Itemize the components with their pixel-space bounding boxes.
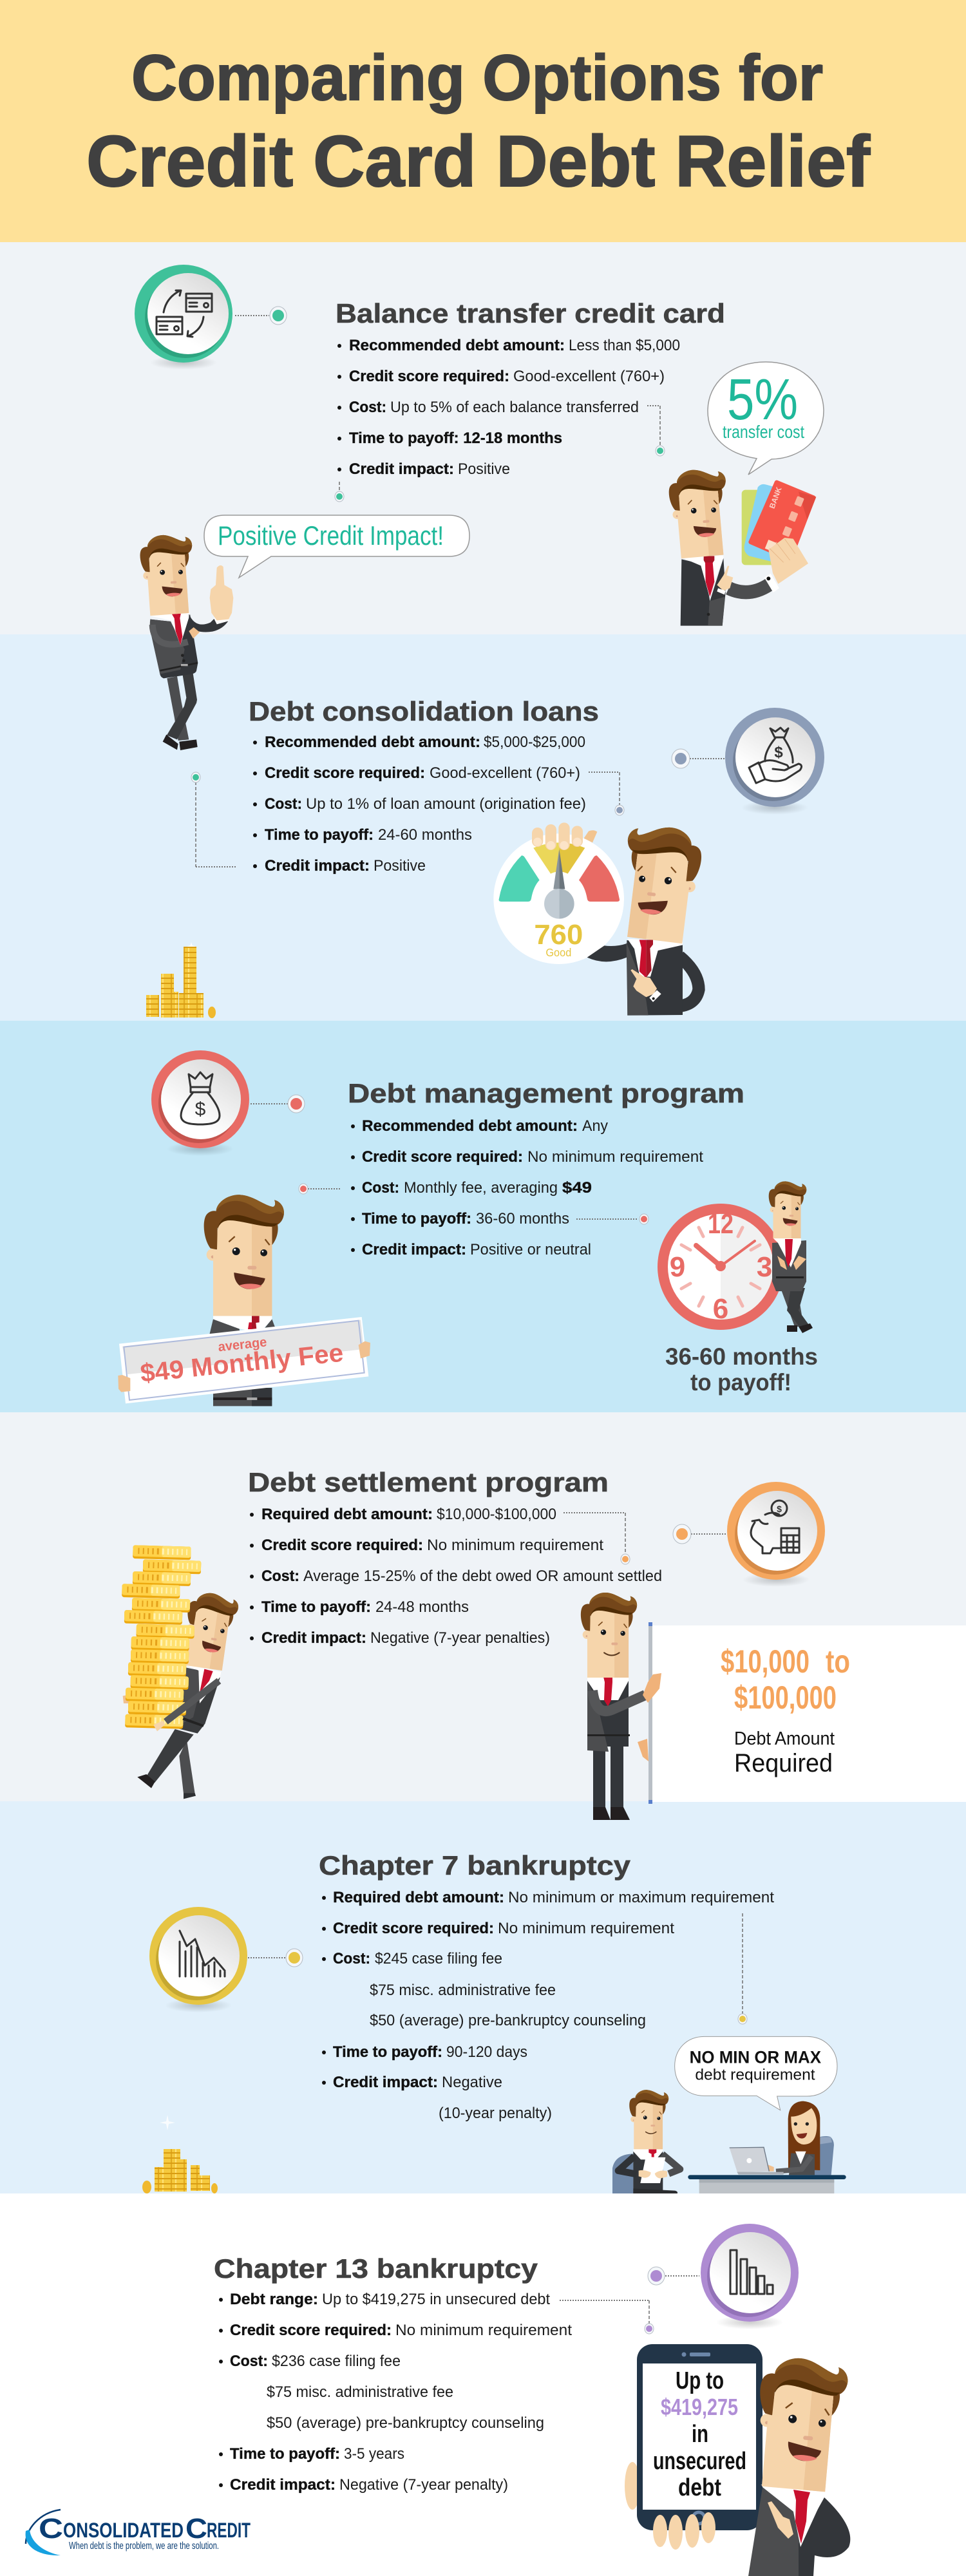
connector: debt range to phone (560, 2300, 654, 2334)
bullet list: 36-60 months (476, 1210, 569, 1227)
icon: money bag: $ (195, 1099, 206, 1120)
character: man with gauge (587, 822, 705, 1016)
bullet list: No minimum requirement (527, 1148, 703, 1166)
panel: debt amount required board (649, 1622, 966, 1804)
bullet list: Time to payoff: (230, 2445, 340, 2463)
title line 2: Credit Card Debt Relief (86, 121, 871, 202)
panel: title banner (0, 0, 966, 242)
bullet list: Negative (7-year penalties) (370, 1629, 550, 1647)
icon: money bag in hand (725, 708, 824, 815)
clock: 6 (713, 1293, 728, 1325)
bullet list: $236 case filing fee (272, 2353, 401, 2370)
bullet list: Positive or neutral (470, 1241, 591, 1258)
bullet list: Positive (458, 460, 510, 478)
bullet list: 3-5 years (344, 2445, 404, 2463)
icon: falling chart (149, 1907, 247, 2012)
character: man holding credit cards (667, 467, 816, 626)
bullet list: Average 15-25% of the debt owed OR amount settled (303, 1567, 662, 1585)
speech bubble: no min or max: debt requirement (695, 2066, 815, 2083)
icon: piggy bank and calculator: $ (777, 1504, 782, 1514)
connector: icon (235, 307, 287, 325)
bullet list: $75 misc. administrative fee (267, 2383, 453, 2401)
bullet list (322, 1889, 774, 2122)
callout: 36-60 months (665, 1343, 818, 1396)
clock: 9 (670, 1251, 685, 1283)
bullet list: $50 (average) pre-bankruptcy counseling (370, 2012, 646, 2029)
bullet list: Credit impact: (261, 1629, 366, 1647)
bullet list: Credit score required: (230, 2322, 392, 2339)
icon: declining bars (701, 2224, 799, 2329)
bullet list: Any (582, 1117, 608, 1135)
bullet list: Good-excellent (760+) (430, 764, 580, 782)
heading: Balance transfer credit card (336, 298, 725, 328)
bullet list: Credit impact: (333, 2074, 438, 2091)
character: man holding credit cards: BANK (768, 486, 784, 510)
heading: Chapter 13 bankruptcy (214, 2253, 538, 2284)
phone with debt limit: unsecured (653, 2448, 746, 2475)
panel: debt amount required board: Debt Amount (734, 1728, 835, 1749)
connector: icon to heading (648, 2267, 699, 2285)
bullet list: 24-60 months (378, 826, 472, 844)
bullet list: Credit score required: (265, 764, 425, 782)
character: man pointing at phone (748, 2355, 850, 2576)
bullet list: Up to 5% of each balance transferred (390, 399, 639, 416)
bullet list (351, 1117, 703, 1258)
bullet list: $245 case filing fee (375, 1950, 502, 1967)
bullet list: Negative (442, 2074, 502, 2091)
bullet list: $10,000-$100,000 (437, 1506, 556, 1523)
icon: piggy bank and calculator (727, 1482, 825, 1587)
bullet list: Credit score required: (333, 1920, 494, 1937)
panel: debt amount required board: $100,000 (734, 1680, 837, 1716)
bullet list: Cost: (265, 795, 302, 813)
bullet list: No minimum requirement (427, 1537, 603, 1554)
bullet list: Cost: (261, 1567, 299, 1585)
bullet list: Credit impact: (362, 1241, 466, 1258)
bullet list (250, 1506, 662, 1647)
connector: icon to cost (248, 1949, 303, 1967)
panel: debt amount required board: Required (734, 1749, 833, 1777)
heading: Debt settlement program (248, 1467, 609, 1497)
connector: icon (251, 1095, 305, 1113)
callout: 36-60 months: 36-60 months (665, 1343, 818, 1370)
bullet list: Positive (374, 857, 426, 875)
character: man holding sign (118, 1195, 370, 1406)
bullet list: Recommended debt amount: (349, 337, 565, 354)
panel: debt amount required board: $10,000 (721, 1643, 810, 1680)
bullet list: 90-120 days (446, 2043, 527, 2061)
logo: Consolidated Credit: REDIT (207, 2519, 251, 2542)
credit score gauge (493, 822, 624, 964)
bullet list: Cost: (333, 1950, 370, 1967)
character: man at board (581, 1593, 661, 1820)
icon: money bag (151, 1050, 249, 1156)
bullet list: Cost: (230, 2353, 268, 2370)
bullet list: Required debt amount: (333, 1889, 504, 1906)
character: woman at laptop (730, 2101, 834, 2175)
bullet list: Credit impact: (265, 857, 370, 875)
logo: Consolidated Credit (26, 2510, 251, 2555)
bullet list: Cost: (349, 399, 386, 416)
credit score gauge: Good (545, 946, 571, 959)
callout: 36-60 months: to payoff! (690, 1369, 791, 1396)
connector: cost to bubble (647, 406, 665, 456)
bullet list: No minimum requirement (395, 2322, 572, 2339)
bullet list: Time to payoff: (362, 1210, 471, 1227)
bullet list: Required debt amount: (261, 1506, 433, 1523)
icon: card transfer (135, 265, 232, 370)
phone with debt limit (625, 2344, 762, 2550)
connector: credit impact (191, 772, 237, 867)
bullet list: No minimum requirement (498, 1920, 674, 1937)
panel: debt amount required board: to (826, 1643, 850, 1680)
phone with debt limit: in (692, 2421, 708, 2448)
panel: Debt management program (0, 1021, 966, 1412)
connector: icon (673, 1524, 726, 1544)
connector: credit impact to bubble (335, 482, 344, 502)
speech bubble: positive credit impact: Positive Credit Impact! (218, 520, 444, 551)
bullet list: Cost: (362, 1179, 399, 1197)
logo: Consolidated Credit: When debt is the problem, we are the solution. (69, 2541, 219, 2552)
bullet list: Credit impact: (349, 460, 454, 478)
bullet list: Good-excellent (760+) (513, 368, 665, 385)
bullet list (253, 734, 586, 875)
bullet list: Less than $5,000 (569, 337, 680, 354)
bullet list: Debt range: (230, 2291, 318, 2308)
clock: 3 (757, 1251, 772, 1283)
speech bubble: positive credit impact (204, 515, 469, 578)
bullet list: No minimum or maximum requirement (508, 1889, 774, 1906)
connector: cost to sign (299, 1184, 340, 1194)
panel: Debt consolidation loans (0, 634, 966, 1021)
bullet list: Credit score required: (261, 1537, 423, 1554)
panel: Chapter 13 bankruptcy (0, 2193, 966, 2576)
heading: Debt management program (348, 1078, 744, 1108)
sign: $49 monthly fee (119, 1317, 368, 1403)
bullet list (219, 2291, 572, 2494)
phone with debt limit: Up to (676, 2367, 724, 2394)
character: man giving thumbs up (138, 533, 233, 750)
logo: Consolidated Credit: ONSOLIDATED (63, 2519, 184, 2542)
bullet list: $50 (average) pre-bankruptcy counseling (267, 2414, 544, 2432)
character: man leaning on clock (769, 1181, 813, 1333)
connector: debt amount to bubble (738, 1913, 747, 2024)
bullet list: Credit impact: (230, 2476, 336, 2494)
bullet list: Credit score required: (362, 1148, 523, 1166)
coin stacks (142, 2115, 218, 2193)
desk (688, 2175, 846, 2193)
clock: 12 (708, 1208, 734, 1240)
character: seated man (612, 2090, 680, 2193)
speech bubble: 5% transfer cost (708, 362, 824, 475)
bullet list: Up to $419,275 in unsecured debt (322, 2291, 550, 2308)
bullet list: 24-48 months (375, 1598, 469, 1616)
heading: Debt consolidation loans (249, 696, 599, 726)
bullet list: Time to payoff: 12-18 months (349, 430, 562, 447)
panel: Debt settlement program (0, 1412, 966, 1820)
bullet list: $49 (562, 1179, 592, 1197)
bullet list: Monthly fee, averaging (404, 1179, 558, 1197)
speech bubble: 5% transfer cost: transfer cost (723, 422, 804, 442)
bullet list: Recommended debt amount: (265, 734, 480, 751)
bullet list: $5,000-$25,000 (484, 734, 585, 751)
bullet list: (10-year penalty) (439, 2105, 552, 2122)
bullet list: Credit score required: (349, 368, 509, 385)
bullet list: $75 misc. administrative fee (370, 1982, 556, 1999)
character: man carrying coins (122, 1545, 240, 1799)
speech bubble: 5% transfer cost: 5% (727, 368, 798, 432)
connector: credit score to gauge (589, 772, 624, 815)
credit score gauge: 760 (534, 919, 583, 951)
logo: Consolidated Credit: C (185, 2513, 207, 2544)
phone with debt limit: $419,275 (661, 2394, 738, 2420)
bullet list: Up to 1% of loan amount (origination fee) (306, 795, 586, 813)
panel: Chapter 7 bankruptcy (0, 1801, 966, 2193)
bullet list: Time to payoff: (333, 2043, 442, 2061)
heading: Chapter 7 bankruptcy (319, 1850, 631, 1880)
title line 1: Comparing Options for (131, 42, 823, 114)
phone with debt limit: debt (678, 2474, 721, 2501)
bullet list: Negative (7-year penalty) (339, 2476, 508, 2494)
speech bubble: no min or max: NO MIN OR MAX (690, 2047, 821, 2067)
bullet list: Recommended debt amount: (362, 1117, 578, 1135)
bullet list (337, 337, 680, 478)
connector: debt amount to panel (564, 1513, 630, 1564)
panel: Balance transfer credit card (0, 242, 966, 750)
clock (658, 1204, 784, 1330)
sign: $49 monthly fee: average (217, 1334, 267, 1354)
connector: time to clock (576, 1214, 649, 1224)
logo: Consolidated Credit: C (39, 2513, 63, 2544)
speech bubble: no min or max (675, 2036, 837, 2110)
bullet list: Time to payoff: (261, 1598, 371, 1616)
coin stack (146, 942, 216, 1018)
bullet list: Time to payoff: (265, 826, 374, 844)
connector: icon (672, 749, 724, 768)
sign: $49 monthly fee: $49 Monthly Fee (139, 1339, 345, 1388)
icon: money bag in hand: $ (774, 744, 783, 761)
